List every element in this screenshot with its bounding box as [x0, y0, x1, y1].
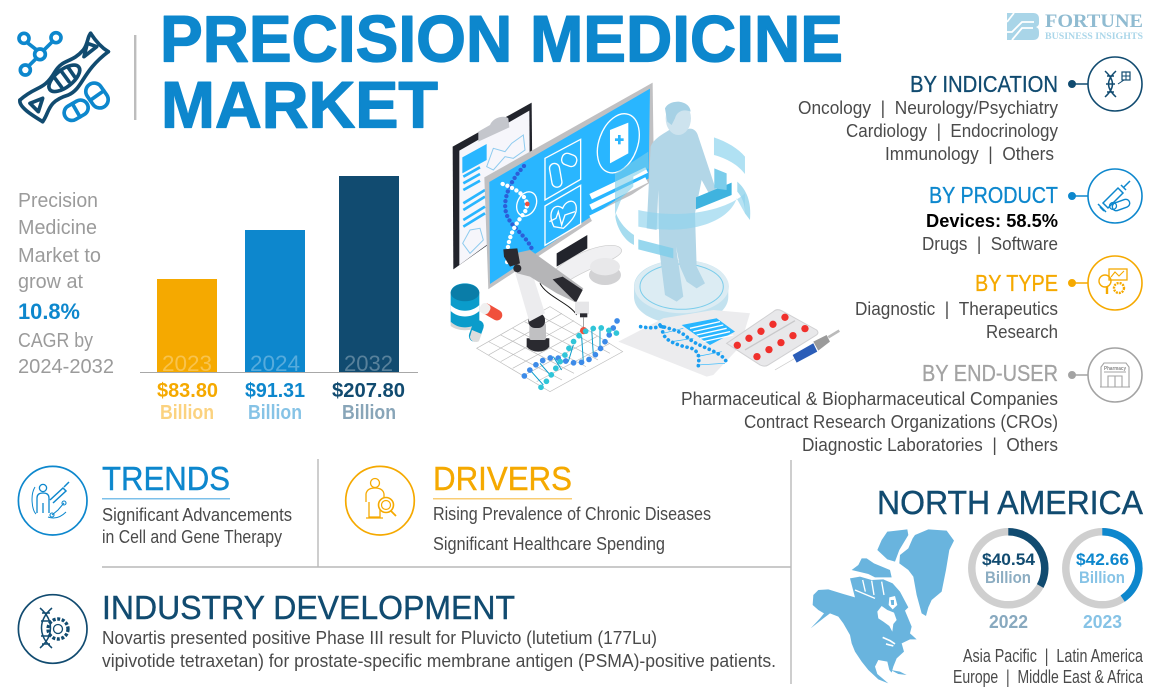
logo: Fortune Business Insights: BUSINESS INSIGHTS [1045, 32, 1143, 42]
section: by product: Drugs | Software [922, 234, 1058, 254]
bar: 2032: Billion [342, 402, 396, 424]
hologram rings [615, 137, 750, 258]
icon: end-user connector and pharmacy: Pharmacy [1104, 366, 1127, 372]
heading: drivers: DRIVERS [433, 460, 572, 497]
text block: other regions [953, 646, 1144, 687]
bar: 2024 [245, 230, 305, 424]
logo: Fortune Business Insights [1007, 11, 1143, 42]
title: MARKET [161, 68, 438, 142]
icon: DNA and gear [18, 595, 87, 663]
human body hologram [647, 102, 717, 302]
donut: 2022: Billion [985, 568, 1031, 587]
donut: 2022: $40.54 [982, 550, 1036, 569]
bar: 2023: Billion [160, 402, 214, 424]
donut: 2023: 2023 [1083, 612, 1122, 632]
donut: 2023: $42.66 [1076, 550, 1129, 569]
icon: DNA, molecule and capsules logo [19, 33, 111, 123]
monitor screen [484, 83, 654, 289]
DNA strand [524, 315, 622, 387]
illustration: isometric precision medicine lab [451, 83, 839, 392]
icon: person with magnifier [346, 466, 414, 535]
icon: end-user connector and pharmacy [1068, 348, 1142, 402]
panel: trends: in Cell and Gene Therapy [102, 527, 282, 547]
section: by indication: BY INDICATION [910, 71, 1058, 97]
logo: Fortune Business Insights: FORTUNE [1045, 11, 1143, 32]
grid mat [477, 307, 623, 392]
icon: person with gene therapy [18, 466, 87, 535]
panel: drivers: Rising Prevalence of Chronic Diseases [433, 504, 711, 524]
bar: 2024: $91.31 [245, 380, 305, 402]
section: by indication: Oncology | Neurology/Psychiatry [798, 98, 1058, 118]
donut: 2022: 2022 [989, 612, 1028, 632]
panel: drivers [346, 460, 711, 554]
section: by end-user [681, 360, 1058, 455]
donut: 2023: Billion [1079, 568, 1125, 587]
panel: industry development [18, 589, 776, 671]
section: by type: Diagnostic | Therapeutics [855, 299, 1058, 319]
scanner platform [634, 260, 729, 324]
bar: 2023: $83.80 [157, 380, 218, 402]
section: by type: BY TYPE [975, 270, 1058, 296]
dividers [102, 459, 791, 684]
monitor stand [547, 235, 622, 285]
capsules [467, 301, 504, 343]
donut: 2023 [1066, 532, 1139, 632]
icon: product connector and syringe [1068, 169, 1142, 223]
section: by product: BY PRODUCT [929, 182, 1058, 208]
bar: 2032: $207.80 [332, 380, 405, 402]
panel: drivers: Significant Healthcare Spending [433, 534, 665, 554]
blue bottle [451, 283, 479, 330]
section: by product [922, 182, 1058, 254]
map: North America [811, 529, 954, 683]
divider: logo separator [134, 35, 136, 120]
panel: trends: Significant Advancements [102, 505, 292, 525]
bar: 2023: 2023 [162, 351, 212, 376]
panel: industry development: vipivotide tetraxetan) for prostate-specific membrane antigen (PSMA)-positive patients. [102, 651, 776, 671]
section: by type [855, 270, 1058, 342]
section: by end-user: Contract Research Organizations (CROs) [744, 412, 1058, 432]
bar: 2032: 2032 [344, 351, 393, 376]
section: by indication: Immunology | Others [885, 144, 1054, 164]
text block: CAGR statement: Medicine [18, 217, 97, 239]
section: by indication: Cardiology | Endocrinology [846, 121, 1058, 141]
bar: 2032 [332, 176, 405, 424]
title: PRECISION MEDICINE [160, 2, 843, 76]
clipboard [453, 103, 533, 269]
text block: CAGR statement: Precision [18, 190, 98, 212]
printed DNA sheet [618, 310, 750, 377]
section: by type: Research [986, 322, 1058, 342]
bar: 2023 [157, 279, 218, 424]
bar: 2024: 2024 [250, 351, 300, 376]
text block: CAGR statement: CAGR by [18, 330, 93, 352]
icon: indication connector and DNA [1068, 57, 1142, 111]
heading: trends: TRENDS [102, 460, 230, 497]
panel: industry development: Novartis presented positive Phase III result for Pluvicto (lutetium (177Lu) [102, 628, 657, 648]
section: by product: Devices: 58.5% [926, 211, 1058, 231]
text block: CAGR statement [18, 190, 114, 378]
text block: CAGR statement: grow at [18, 271, 83, 293]
section: by end-user: BY END-USER [922, 360, 1058, 386]
syringe [775, 331, 839, 370]
title [160, 2, 843, 142]
section: by end-user: Diagnostic Laboratories | Others [802, 435, 1058, 455]
text block: CAGR statement: 2024-2032 [18, 356, 114, 378]
section: by end-user: Pharmaceutical & Biopharmaceutical Companies [681, 389, 1058, 409]
icon: type connector and chart with gear [1068, 256, 1142, 310]
robot arm [503, 248, 589, 352]
section: by indication [798, 71, 1058, 164]
text block: CAGR statement: 10.8% [18, 299, 80, 324]
heading: north america: NORTH AMERICA [877, 484, 1143, 521]
blister pack [727, 310, 818, 366]
bar: 2024: Billion [248, 402, 302, 424]
donut: 2022 [972, 532, 1045, 632]
heading: industry development: INDUSTRY DEVELOPMENT [102, 589, 515, 626]
text block: CAGR statement: Market to [18, 245, 101, 267]
bar chart: market size [140, 176, 418, 424]
panel: trends [18, 460, 292, 547]
